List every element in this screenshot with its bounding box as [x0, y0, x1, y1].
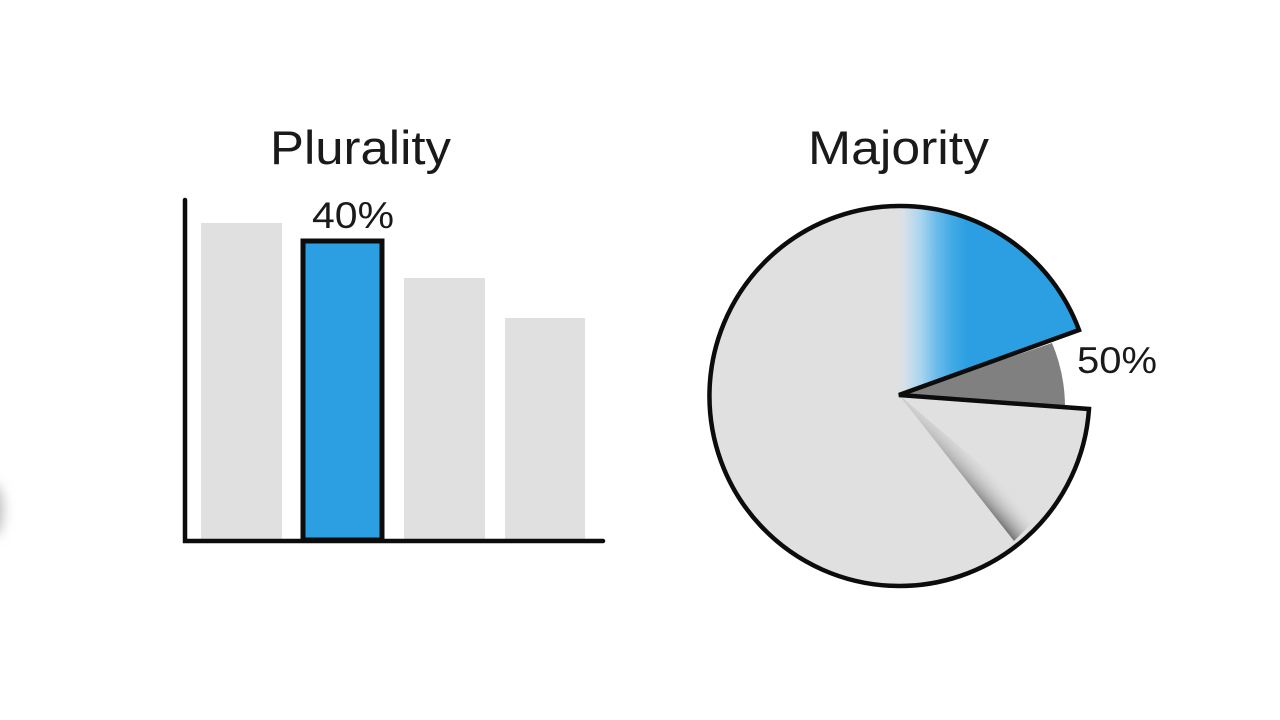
slice shadow — [901, 398, 1028, 541]
bar: fourth option — [505, 318, 585, 540]
bar: first option — [201, 223, 282, 540]
pie outline — [709, 206, 1089, 586]
label: 40%: 40% — [312, 195, 394, 236]
bar chart: plurality — [185, 195, 603, 541]
heading: Plurality: Plurality — [270, 121, 452, 174]
heading: Majority: Majority — [808, 121, 990, 174]
slice: large grey portion — [709, 206, 1089, 586]
slice: dark grey wedge — [899, 343, 1065, 406]
bar: third option — [404, 278, 485, 540]
decorative edge smudge — [0, 484, 3, 536]
pie chart: majority — [709, 206, 1157, 586]
slice: blue — [899, 206, 1079, 395]
label: 50%: 50% — [1077, 340, 1157, 381]
bar: winning option 40% — [303, 241, 382, 540]
chart axes — [185, 200, 603, 541]
